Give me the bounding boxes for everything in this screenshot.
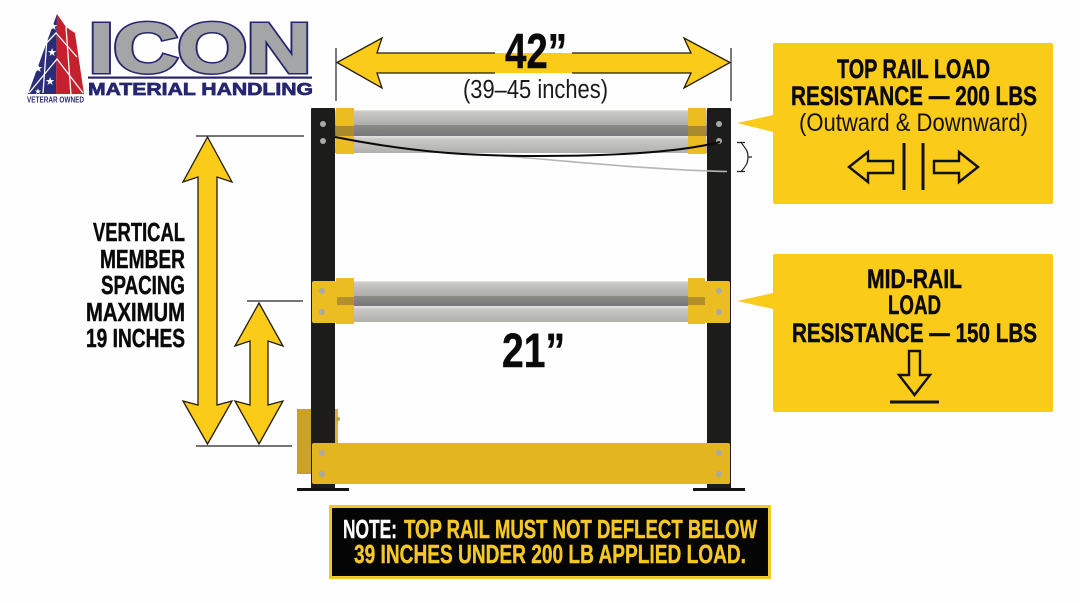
spacing label: MAXIMUM [86,297,185,327]
spacing label [86,217,185,353]
callout heading: MID-RAIL [867,264,962,294]
note background [330,506,770,578]
note label: NOTE: [343,514,397,544]
spacing label: 19 INCHES [86,323,185,353]
top rail [320,108,722,154]
logo icon: flag building [28,14,84,96]
note box [330,506,770,578]
logo icon: flag building: ★ [45,75,55,88]
width range: (39–45 inches) [463,76,608,104]
logo caption: VETERAR OWNED [27,96,84,104]
reference lines [196,136,304,446]
spacing label: SPACING [101,270,185,300]
width arrow [336,38,731,101]
callout: mid-rail load [737,254,1053,412]
callout: top rail load [737,43,1053,204]
icon: outward arrows [849,143,978,190]
logo icon: flag building: ★ [33,62,43,75]
callout box [737,43,1053,204]
note line 1: TOP RAIL MUST NOT DEFLECT BELOW [404,514,757,544]
logo wordmark: ICON: ICON [89,9,311,87]
short double arrow [235,303,283,444]
callout heading: TOP RAIL LOAD [837,54,990,84]
callout direction: (Outward & Downward) [799,109,1028,137]
spacing label: VERTICAL [93,217,185,247]
mid rail width: 21” [502,325,565,378]
callout box [737,254,1053,412]
spacing label: MEMBER [100,244,185,274]
right post [693,108,745,491]
dimension: vertical member spacing [86,136,304,446]
logo divider line [88,76,312,79]
deflection bracket [737,142,752,172]
logo icon: flag building: ★ [34,87,42,96]
width value: 42” [505,25,567,79]
left post [297,108,349,491]
callout heading line 2: LOAD [888,290,941,320]
deflection curve [335,137,727,172]
logo icon: flag building: ★ [47,46,57,59]
logo: ICON Material Handling [27,9,313,104]
logo icon: flag building: ★ [37,34,47,47]
side bracket [297,409,340,474]
mid rail [312,278,730,324]
logo wordmark: Material Handling: MATERIAL HANDLING [88,79,313,99]
note line 2: 39 INCHES UNDER 200 LB APPLIED LOAD. [354,539,746,569]
icon: downward arrow [890,351,939,402]
dimension: 42 inch width [336,25,731,104]
logo wordmark: ICON: ICON [89,9,311,87]
tall double arrow [183,137,232,444]
guardrail drawing [297,108,752,491]
bottom kick plate [312,443,730,484]
logo icon: flag building: ★ [48,20,58,33]
